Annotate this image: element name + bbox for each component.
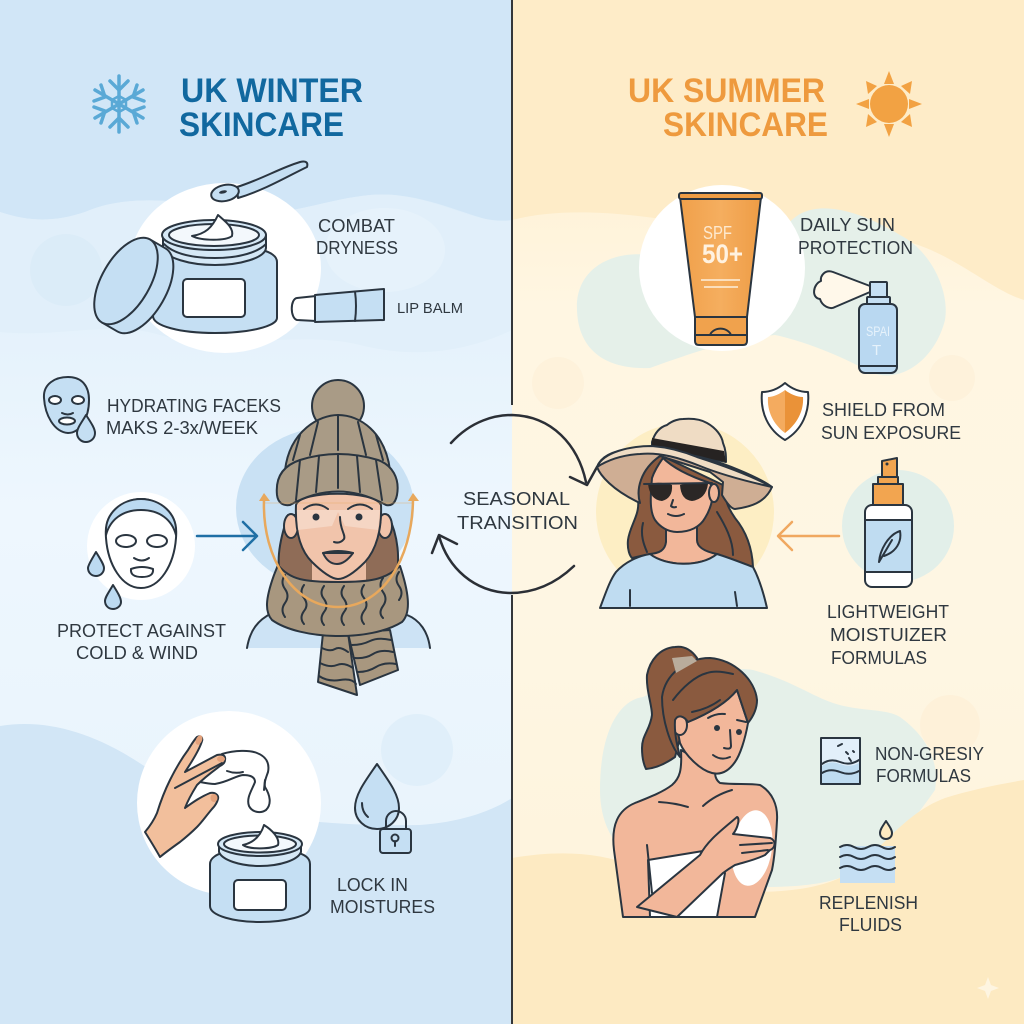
label: protect: PROTECT AGAINST: [57, 621, 226, 641]
label: seasonal transition: [457, 489, 578, 533]
label: lock in moistures: MOISTURES: [330, 897, 435, 917]
label: protect: [57, 621, 226, 663]
label: lightweight moisturizer: FORMULAS: [831, 648, 927, 668]
label: lightweight moisturizer: LIGHTWEIGHT: [827, 602, 949, 622]
icon: spray bottle: [814, 271, 897, 373]
label: hydrating masks: HYDRATING FACEKS: [107, 396, 281, 416]
label: non-greasy formulas: FORMULAS: [876, 766, 971, 786]
icon: sheet mask: [87, 492, 195, 609]
label: hydrating masks: MAKS 2-3x/WEEK: [106, 418, 258, 438]
arrow: blue: [197, 522, 257, 550]
label: shield from sun: [821, 400, 961, 443]
illustration: summer woman: [596, 419, 774, 608]
icon: water with drop: [840, 821, 895, 883]
title: summer: [628, 72, 828, 144]
label: combat dryness: DRYNESS: [316, 238, 398, 258]
label: lock in moistures: LOCK IN: [337, 875, 408, 895]
arrow: orange: [778, 522, 839, 550]
icon: spray bottle: T: [872, 342, 881, 359]
label: replenish fluids: [819, 893, 918, 935]
illustration: woman applying sunscreen: [613, 647, 777, 917]
icon: moisturiser jar with spoon: [81, 162, 321, 353]
label: combat dryness: [316, 216, 398, 258]
panel: winter background: [0, 0, 512, 1024]
icon: lip balm: [292, 289, 384, 322]
label: replenish fluids: FLUIDS: [839, 915, 902, 935]
label: non-greasy formulas: NON-GRESIY: [875, 744, 984, 764]
label: seasonal transition: TRANSITION: [457, 513, 578, 533]
panel: summer background: [512, 0, 1024, 1024]
arrows: seasonal cycle: [432, 415, 597, 593]
icon: SPF tube: [639, 185, 805, 351]
title: summer: UK SUMMER: [628, 72, 825, 110]
icon: SPF tube: 50+: [702, 239, 743, 269]
icon: non-greasy swatch: [821, 738, 860, 784]
title: summer: SKINCARE: [663, 106, 828, 144]
label: hydrating masks: [106, 396, 281, 438]
label: daily sun protection: PROTECTION: [798, 238, 913, 258]
label: lock in moistures: [330, 875, 435, 917]
label: lightweight moisturizer: [827, 602, 949, 668]
title: winter: [179, 72, 363, 144]
label: shield from sun: SUN EXPOSURE: [821, 423, 961, 443]
label: combat dryness: COMBAT: [318, 216, 395, 236]
title: winter: UK WINTER: [181, 72, 363, 110]
illustration: winter woman: [236, 380, 430, 695]
title: winter: SKINCARE: [179, 106, 344, 144]
label: lip balm: LIP BALM: [397, 300, 463, 317]
label: non-greasy formulas: [875, 744, 984, 786]
icon: small face mask: [44, 377, 95, 442]
icon: drop with padlock: [355, 764, 411, 853]
icon: shield: [762, 383, 808, 440]
icon: spray bottle: SPAI: [866, 323, 890, 339]
icon: sun: [856, 71, 922, 137]
label: lightweight moisturizer: MOISTUIZER: [830, 625, 947, 645]
label: protect: COLD & WIND: [76, 643, 198, 663]
label: seasonal transition: SEASONAL: [463, 489, 570, 509]
label: daily sun protection: DAILY SUN: [800, 215, 895, 235]
icon: SPF tube: SPF: [703, 223, 732, 243]
icon: hand with cream: [137, 711, 321, 895]
divider: [511, 0, 513, 1024]
icon: snowflake: [94, 76, 144, 132]
icon: cream jar: [210, 825, 310, 922]
label: shield from sun: SHIELD FROM: [822, 400, 945, 420]
label: replenish fluids: REPLENISH: [819, 893, 918, 913]
label: daily sun protection: [798, 215, 913, 258]
icon: moisturiser spray: [842, 458, 954, 587]
